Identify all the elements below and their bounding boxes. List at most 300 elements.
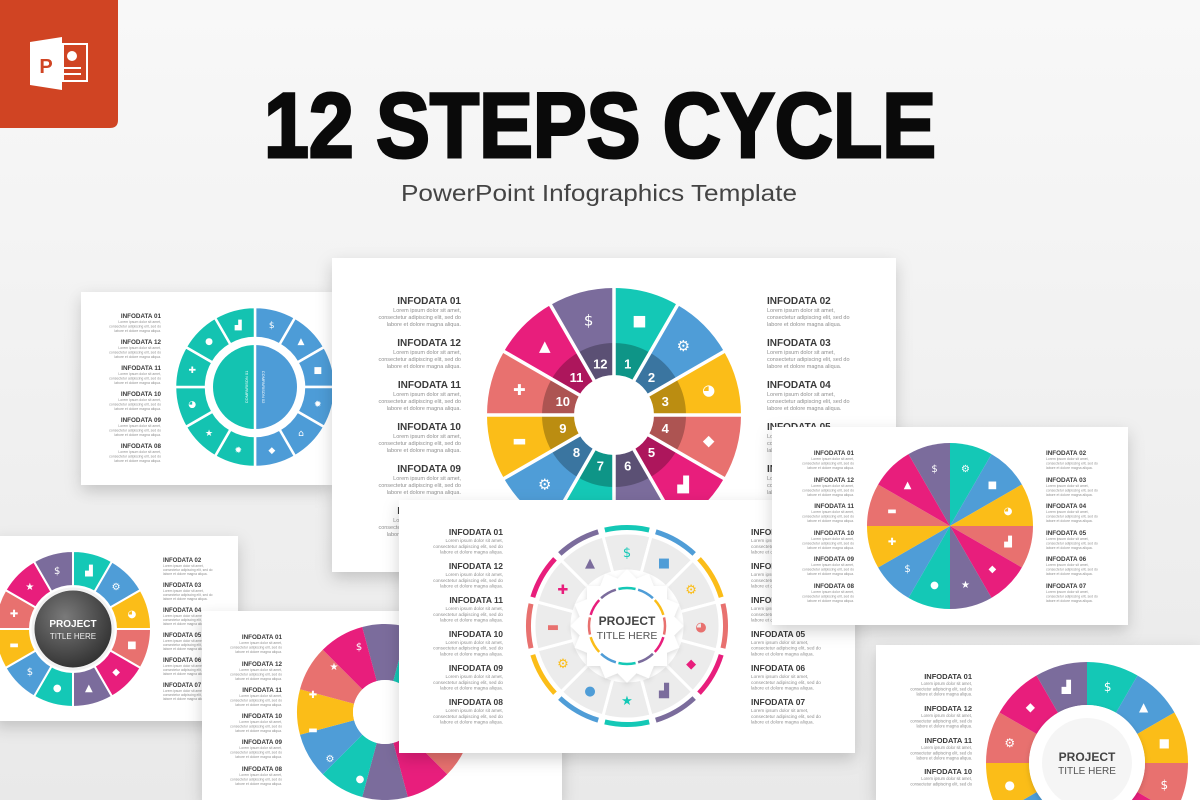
logo: powerpoint [0,0,118,128]
chart: puzzle wheel: $ [1104,680,1112,694]
step numbers: 3 [662,394,669,409]
chart: pie: ● [930,580,939,591]
bottom-right text blocks: labore et dolore magna aliqua. [916,724,972,729]
left card text blocks: Lorem ipsum dolor sit amet, [118,372,161,376]
icons: main wheel: ⚙ [677,337,690,355]
right slide right text: Lorem ipsum dolor sit amet, [1046,563,1089,567]
right slide left text: Lorem ipsum dolor sit amet, [811,457,854,461]
panel: left card comparison [81,292,344,485]
right slide right text: Lorem ipsum dolor sit amet, [1046,457,1089,461]
main left text blocks: Lorem ipsum dolor sit amet, [393,392,461,398]
center front left text blocks: Lorem ipsum dolor sit amet, [446,606,503,611]
bottom-left text blocks: consectetur adipiscing elit, sed do [163,643,213,647]
bcl text blocks: Lorem ipsum dolor sit amet, [239,694,282,698]
bottom-right text blocks: labore et dolore magna aliqua. [916,692,972,697]
chart: pie: ★ [961,580,970,591]
main left text blocks: Lorem ipsum dolor sit amet, [393,476,461,482]
bottom-left text blocks: INFODATA 02 [163,558,202,564]
left card text blocks: INFODATA 11 [121,365,161,372]
right slide right text: labore et dolore magna aliqua. [1046,546,1093,550]
chart: arrow cycle wheel: $ [27,667,33,678]
center front left text blocks: INFODATA 08 [449,697,503,707]
center front left text blocks: INFODATA 01 [449,527,503,537]
bottom-left text blocks: consectetur adipiscing elit, sed do [163,593,213,597]
right slide right text: consectetur adipiscing elit, sed do [1046,461,1098,465]
icons: main wheel: ▬ [512,432,526,450]
center front right text blocks: consectetur adipiscing elit, sed do [751,714,821,719]
main left text blocks: INFODATA 11 [398,380,461,391]
right slide left text: consectetur adipiscing elit, sed do [802,488,854,492]
center front right text blocks: labore et dolore magna aliqua. [751,652,814,657]
bottom-right text blocks: INFODATA 11 [925,736,972,745]
bcl text blocks: Lorem ipsum dolor sit amet, [239,668,282,672]
chart: pie: ■ [988,480,997,491]
bcl text blocks: labore et dolore magna aliqua. [235,755,282,759]
right slide right text: labore et dolore magna aliqua. [1046,466,1093,470]
right slide right text: INFODATA 05 [1046,530,1087,537]
chart: pie: $ [904,564,911,575]
step numbers: 10 [556,394,570,409]
right slide right text: labore et dolore magna aliqua. [1046,572,1093,576]
bottom-left text blocks: labore et dolore magna aliqua. [163,622,208,626]
chart: arrow cycle wheel: ● [53,683,62,694]
main right text blocks: INFODATA 06 [767,464,831,475]
subtitle: PowerPoint Infographics Template [401,180,797,206]
chart: pie [857,433,1043,619]
chart: comparison wheel: ▲ [298,337,305,347]
step numbers: 1 [624,356,631,371]
main right text blocks: labore et dolore magna aliqua. [767,364,842,370]
bottom-left text blocks: labore et dolore magna aliqua. [163,647,208,651]
chart: comparison wheel: ⌂ [298,429,304,439]
chart: pie: ▬ [887,506,897,517]
chart: comparison wheel: COMPARISON 01 [244,370,249,403]
bcl text blocks: Lorem ipsum dolor sit amet, [239,773,282,777]
icons: project ring: ✚ [557,583,568,598]
icons: swirl wheel [308,642,365,785]
center front left text blocks: consectetur adipiscing elit, sed do [433,544,503,549]
icons: project ring: ■ [658,556,670,571]
left card text blocks: consectetur adipiscing elit, sed do [109,428,161,432]
bottom-right text blocks: Lorem ipsum dolor sit amet, [921,776,972,781]
right slide left text: Lorem ipsum dolor sit amet, [811,590,854,594]
bottom-left text blocks: consectetur adipiscing elit, sed do [163,693,213,697]
right slide left text: consectetur adipiscing elit, sed do [802,461,854,465]
main left text blocks: labore et dolore magna aliqua. [387,322,461,328]
icons: main wheel: ● [582,501,595,519]
bcl text blocks: INFODATA 09 [242,739,282,746]
bottom-right text blocks: consectetur adipiscing elit, sed do [910,686,973,691]
title: 12 STEPS CYCLE [264,75,936,177]
center front left text blocks: INFODATA 12 [449,561,503,571]
center front right text blocks [751,527,821,725]
bottom-right text blocks: INFODATA 01 [924,672,972,681]
chart: arrow cycle wheel: ◕ [128,609,137,620]
right slide left text: Lorem ipsum dolor sit amet, [811,510,854,514]
chart: puzzle wheel: ● [1004,778,1015,792]
bottom-left text blocks: Lorem ipsum dolor sit amet, [163,664,204,668]
panel: right pie slide [772,427,1128,625]
main left text blocks: INFODATA 08 [397,506,461,517]
chart: pie: ▟ [1003,535,1012,548]
center front left text blocks: INFODATA 10 [449,629,503,639]
main left text blocks [378,296,461,538]
right slide left text: labore et dolore magna aliqua. [807,546,854,550]
step numbers: 6 [624,459,631,474]
chart: comparison wheel: COMPARISON 02 [261,371,266,404]
step numbers: 11 [570,370,583,385]
chart: pie: ⚙ [961,464,970,475]
icons: main wheel: ▲ [539,337,551,355]
chart: swirl wheel [265,592,505,800]
icons: project ring: $ [623,546,631,561]
main left text blocks: Lorem ipsum dolor sit amet, [393,434,461,440]
left card text blocks: consectetur adipiscing elit, sed do [109,324,161,328]
right slide right text: Lorem ipsum dolor sit amet, [1046,484,1089,488]
main right text blocks: Lorem ipsum dolor sit amet, [767,434,835,440]
main right text blocks: INFODATA 07 [767,506,831,517]
bcl text blocks: consectetur adipiscing elit, sed do [230,777,282,781]
left card text blocks: Lorem ipsum dolor sit amet, [118,398,161,402]
main left text blocks: labore et dolore magna aliqua. [387,532,461,538]
main left text blocks: Lorem ipsum dolor sit amet, [393,308,461,314]
left card text blocks: labore et dolore magna aliqua. [114,433,161,437]
right slide left text: INFODATA 08 [814,583,854,590]
step numbers: 4 [662,421,670,436]
main right text blocks: consectetur adipiscing elit, sed do [767,399,850,405]
chart: arrow cycle wheel: TITLE HERE [50,632,96,641]
bottom-left text blocks: consectetur adipiscing elit, sed do [163,668,213,672]
icons: project ring: ▲ [585,556,595,571]
bcl text blocks: Lorem ipsum dolor sit amet, [239,641,282,645]
bottom-left text blocks: Lorem ipsum dolor sit amet, [163,564,204,568]
left card text blocks: Lorem ipsum dolor sit amet, [118,346,161,350]
chart: pie: ▲ [904,480,912,491]
left card text blocks: labore et dolore magna aliqua. [114,381,161,385]
chart: comparison wheel: ■ [314,366,322,376]
center front right text blocks: consectetur adipiscing elit, sed do [751,680,821,685]
center front right text blocks: INFODATA 07 [751,697,805,707]
main right text blocks: Lorem ipsum dolor sit amet, [767,518,835,524]
center front right text blocks: Lorem ipsum dolor sit amet, [751,606,808,611]
right slide left text: labore et dolore magna aliqua. [807,493,854,497]
bottom-left text blocks: INFODATA 06 [163,658,202,664]
icons: swirl wheel: ★ [330,662,339,673]
right slide left text: INFODATA 12 [814,477,854,484]
right slide right text: labore et dolore magna aliqua. [1046,519,1093,523]
main right text blocks: Lorem ipsum dolor sit amet, [767,392,835,398]
step numbers: 7 [597,459,604,474]
chart: pie: ◆ [989,564,997,575]
icons: main wheel: ✚ [513,381,526,399]
icons: project ring: ◕ [695,620,707,635]
step numbers: 9 [559,421,566,436]
step numbers: 5 [648,445,655,460]
left card text blocks: consectetur adipiscing elit, sed do [109,454,161,458]
main left text blocks: consectetur adipiscing elit, sed do [378,315,461,321]
bottom-right text blocks: consectetur adipiscing elit, sed do [910,750,973,755]
bcl text blocks: INFODATA 08 [242,766,282,773]
bottom-left text blocks: labore et dolore magna aliqua. [163,597,208,601]
center front left text blocks: labore et dolore magna aliqua. [440,652,503,657]
left card text blocks [109,313,161,463]
bottom-right text blocks: Lorem ipsum dolor sit amet, [921,713,972,718]
chart: comparison wheel [166,298,344,476]
chart: puzzle wheel: ⚙ [1004,736,1015,750]
chart: arrow cycle wheel: ▬ [9,640,19,651]
main right text blocks: INFODATA 05 [767,422,831,433]
right slide right text: consectetur adipiscing elit, sed do [1046,567,1098,571]
right slide right text: INFODATA 02 [1046,450,1087,457]
panel: bottom-center-left slide [202,592,562,800]
right slide left text: INFODATA 09 [814,556,854,563]
bottom-left text blocks: INFODATA 04 [163,608,202,614]
main left text blocks: consectetur adipiscing elit, sed do [378,483,461,489]
main right text blocks: INFODATA 02 [767,296,831,307]
icons: swirl wheel: ✚ [309,690,317,701]
chart: arrow cycle wheel: ▟ [84,564,93,577]
chart: comparison wheel: ▟ [234,319,243,331]
main right text blocks [767,296,850,538]
right slide right text: Lorem ipsum dolor sit amet, [1046,537,1089,541]
right slide right text [1046,450,1098,603]
chart: pie: $ [931,464,938,475]
bcl text blocks: labore et dolore magna aliqua. [235,782,282,786]
right slide left text: consectetur adipiscing elit, sed do [802,541,854,545]
right slide right text: consectetur adipiscing elit, sed do [1046,541,1098,545]
chart: arrow cycle wheel: ⚙ [112,582,121,593]
center front left text blocks: labore et dolore magna aliqua. [440,720,503,725]
right slide right text: INFODATA 07 [1046,583,1087,590]
step numbers [556,356,670,474]
chart: arrow cycle wheel [0,542,160,716]
main left text blocks: consectetur adipiscing elit, sed do [378,441,461,447]
chart: arrow cycle wheel: PROJECT [49,619,97,630]
icons: swirl wheel: ▬ [308,725,318,736]
chart: pie: ✚ [888,537,896,548]
chart: comparison wheel: ✹ [314,400,322,410]
center front left text blocks: consectetur adipiscing elit, sed do [433,646,503,651]
icons: project ring: ▬ [547,620,559,635]
bottom-left text blocks: consectetur adipiscing elit, sed do [163,618,213,622]
bcl text blocks: INFODATA 12 [242,661,282,668]
left card text blocks: Lorem ipsum dolor sit amet, [118,320,161,324]
logo: powerpoint: P [39,56,53,78]
main left text blocks: consectetur adipiscing elit, sed do [378,399,461,405]
main left text blocks: Lorem ipsum dolor sit amet, [393,350,461,356]
bcl text blocks: consectetur adipiscing elit, sed do [230,724,282,728]
main right text blocks: Lorem ipsum dolor sit amet, [767,476,835,482]
icons: project ring [547,546,707,709]
step numbers: 12 [593,356,608,371]
chart: comparison wheel: ● [205,337,213,347]
bottom-left text blocks: consectetur adipiscing elit, sed do [163,568,213,572]
icons: main wheel: ★ [633,501,646,519]
main left text blocks: consectetur adipiscing elit, sed do [378,525,461,531]
left card text blocks: Lorem ipsum dolor sit amet, [118,450,161,454]
center front left text blocks [433,527,503,725]
bottom-left text blocks [163,558,213,701]
left card text blocks: labore et dolore magna aliqua. [114,407,161,411]
icons: main wheel: ■ [632,312,646,330]
main right text blocks: Lorem ipsum dolor sit amet, [767,308,835,314]
left card text blocks: INFODATA 09 [121,417,161,424]
bcl text blocks: labore et dolore magna aliqua. [235,677,282,681]
center front right text blocks: Lorem ipsum dolor sit amet, [751,538,808,543]
center front left text blocks: labore et dolore magna aliqua. [440,584,503,589]
bottom-left text blocks: Lorem ipsum dolor sit amet, [163,614,204,618]
main left text blocks: INFODATA 12 [397,338,461,349]
main right text blocks: consectetur adipiscing elit, sed do [767,441,850,447]
bcl text blocks: labore et dolore magna aliqua. [235,729,282,733]
left card text blocks: consectetur adipiscing elit, sed do [109,350,161,354]
left card text blocks: labore et dolore magna aliqua. [114,459,161,463]
center front right text blocks: INFODATA 02 [751,527,805,537]
bcl text blocks: labore et dolore magna aliqua. [235,650,282,654]
chart: arrow cycle wheel: ▲ [85,683,93,694]
bottom-right text blocks: Lorem ipsum dolor sit amet, [921,681,972,686]
left card text blocks: labore et dolore magna aliqua. [114,355,161,359]
bcl text blocks: consectetur adipiscing elit, sed do [230,645,282,649]
left card text blocks: INFODATA 12 [121,339,161,346]
icons: project ring: ⚙ [685,583,697,598]
main right text blocks: INFODATA 03 [767,338,831,349]
center front right text blocks: labore et dolore magna aliqua. [751,584,814,589]
main right text blocks: consectetur adipiscing elit, sed do [767,357,850,363]
right slide left text: labore et dolore magna aliqua. [807,519,854,523]
left card text blocks: Lorem ipsum dolor sit amet, [118,424,161,428]
icons: swirl wheel: ● [356,774,365,785]
right slide left text [802,450,854,603]
center front left text blocks: Lorem ipsum dolor sit amet, [446,640,503,645]
center front right text blocks: Lorem ipsum dolor sit amet, [751,572,808,577]
left card text blocks: labore et dolore magna aliqua. [114,329,161,333]
icons: project ring: ★ [621,694,633,709]
center front left text blocks: Lorem ipsum dolor sit amet, [446,572,503,577]
center front right text blocks: Lorem ipsum dolor sit amet, [751,640,808,645]
main right text blocks: labore et dolore magna aliqua. [767,322,842,328]
center front left text blocks: labore et dolore magna aliqua. [440,550,503,555]
center front right text blocks: labore et dolore magna aliqua. [751,720,814,725]
main right text blocks: labore et dolore magna aliqua. [767,490,842,496]
chart: project ring [528,527,726,725]
chart: pie: ◕ [1004,506,1013,517]
icons: main wheel: ⚙ [538,476,551,494]
center front left text blocks: INFODATA 11 [449,595,503,605]
right slide left text: Lorem ipsum dolor sit amet, [811,563,854,567]
chart: arrow cycle wheel: ★ [25,582,34,593]
chart: puzzle wheel [974,650,1200,800]
main right text blocks: labore et dolore magna aliqua. [767,448,842,454]
center front left text blocks: labore et dolore magna aliqua. [440,686,503,691]
center front left text blocks: INFODATA 09 [449,663,503,673]
chart: puzzle wheel: TITLE HERE [1058,766,1116,777]
main right text blocks: consectetur adipiscing elit, sed do [767,525,850,531]
center front right text blocks: Lorem ipsum dolor sit amet, [751,674,808,679]
right slide left text: INFODATA 01 [814,450,854,457]
chart: project ring: PROJECT [599,614,656,628]
chart: main 12-step wheel [472,273,756,557]
left card text blocks: INFODATA 01 [121,313,161,320]
right slide left text: Lorem ipsum dolor sit amet, [811,537,854,541]
bcl text blocks: Lorem ipsum dolor sit amet, [239,720,282,724]
center front left text blocks: consectetur adipiscing elit, sed do [433,578,503,583]
center front right text blocks: INFODATA 06 [751,663,805,673]
bcl text blocks: consectetur adipiscing elit, sed do [230,698,282,702]
center front right text blocks: consectetur adipiscing elit, sed do [751,578,821,583]
center front right text blocks: consectetur adipiscing elit, sed do [751,544,821,549]
right slide left text: consectetur adipiscing elit, sed do [802,514,854,518]
center front left text blocks: consectetur adipiscing elit, sed do [433,714,503,719]
main left text blocks: Lorem ipsum dolor sit amet, [393,518,461,524]
bcl text blocks: labore et dolore magna aliqua. [235,703,282,707]
icons: main wheel: $ [584,312,593,330]
bottom-left text blocks: Lorem ipsum dolor sit amet, [163,589,204,593]
icons: project ring: ▟ [658,682,670,699]
right slide left text: labore et dolore magna aliqua. [807,466,854,470]
center front right text blocks: INFODATA 04 [751,595,805,605]
left card text blocks: INFODATA 10 [121,391,161,398]
main left text blocks: INFODATA 01 [397,296,461,307]
right slide right text: labore et dolore magna aliqua. [1046,493,1093,497]
icons: main wheel: ◆ [703,432,715,450]
step numbers: 2 [648,370,655,385]
left card text blocks: consectetur adipiscing elit, sed do [109,376,161,380]
main left text blocks: labore et dolore magna aliqua. [387,448,461,454]
bottom-left text blocks: INFODATA 05 [163,633,202,639]
bottom-right text blocks [910,672,973,786]
chart: puzzle wheel: PROJECT [1059,750,1116,764]
icons: swirl wheel: ⚙ [326,754,334,765]
right slide left text: labore et dolore magna aliqua. [807,599,854,603]
bottom-left text blocks: Lorem ipsum dolor sit amet, [163,689,204,693]
bottom-right text blocks: INFODATA 10 [924,767,972,776]
main left text blocks: labore et dolore magna aliqua. [387,406,461,412]
right slide right text: Lorem ipsum dolor sit amet, [1046,590,1089,594]
icons: main wheel [512,312,715,519]
center front right text blocks: consectetur adipiscing elit, sed do [751,646,821,651]
chart: comparison wheel: $ [269,321,275,331]
chart: puzzle wheel: ◆ [1026,700,1036,714]
main right text blocks: labore et dolore magna aliqua. [767,406,842,412]
chart: comparison wheel: ◆ [268,446,275,456]
chart: project ring: TITLE HERE [597,630,657,642]
panel: center front slide [399,500,855,753]
main left text blocks: labore et dolore magna aliqua. [387,364,461,370]
chart: arrow cycle wheel: ■ [127,640,137,651]
right slide right text: INFODATA 04 [1046,503,1087,510]
main right text blocks: consectetur adipiscing elit, sed do [767,315,850,321]
icons: project ring: ● [584,684,596,699]
panel: main slide [332,258,896,572]
bottom-left text blocks: labore et dolore magna aliqua. [163,697,208,701]
chart: puzzle wheel: ■ [1159,736,1170,750]
center front left text blocks: Lorem ipsum dolor sit amet, [446,674,503,679]
bottom-right text blocks: consectetur adipiscing elit, sed do [910,718,973,723]
right slide left text: consectetur adipiscing elit, sed do [802,594,854,598]
bottom-left text blocks: INFODATA 07 [163,683,202,689]
right slide left text: INFODATA 10 [814,530,854,537]
icons: main wheel: ▟ [678,476,690,494]
bottom-right text blocks: Lorem ipsum dolor sit amet, [921,745,972,750]
center front left text blocks: Lorem ipsum dolor sit amet, [446,708,503,713]
bcl text blocks: INFODATA 10 [242,713,282,720]
icons: project ring: ◆ [686,657,696,672]
right slide right text: INFODATA 03 [1046,477,1087,484]
chart: comparison wheel: ★ [205,429,213,439]
chart: comparison wheel: ✚ [188,366,196,376]
panel: bottom-right puzzle slide [876,645,1200,800]
